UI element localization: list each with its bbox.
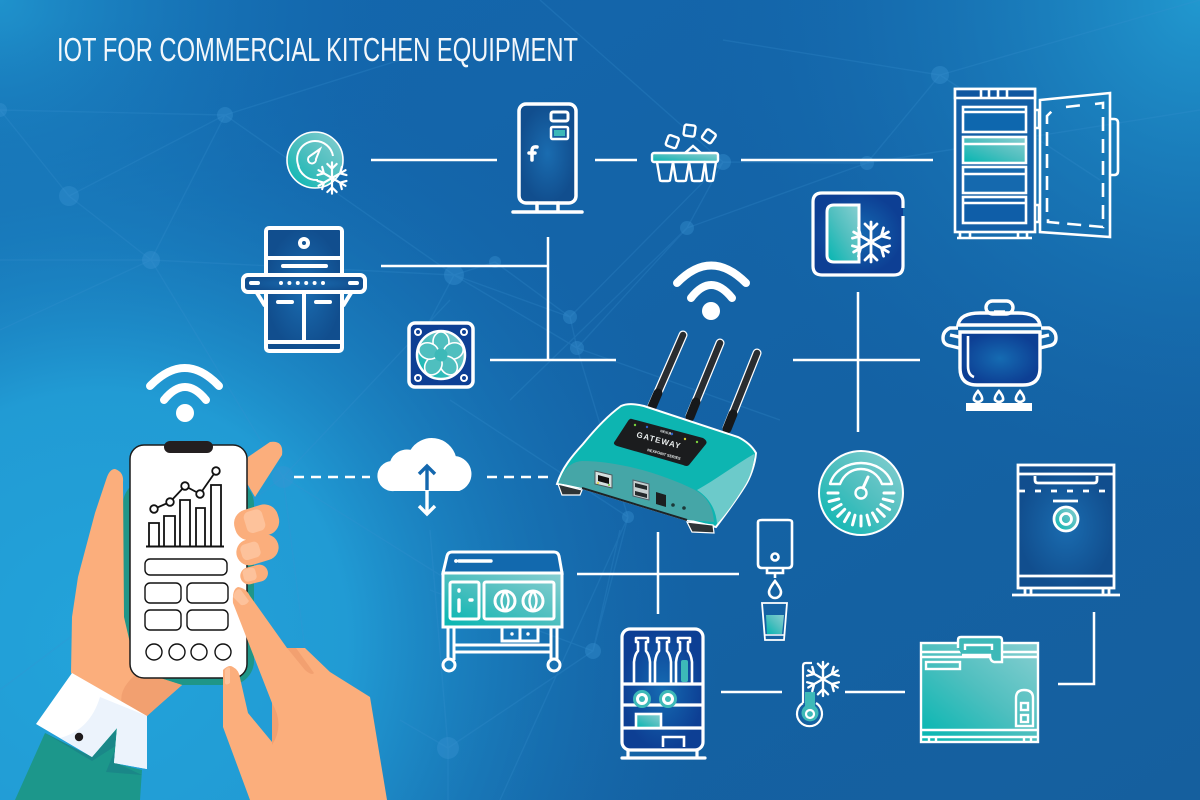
icon: temperature dial with snowflake bbox=[287, 132, 348, 194]
left hand fingers bbox=[231, 501, 283, 544]
sleeve bbox=[15, 728, 142, 800]
gateway shell bbox=[557, 404, 756, 527]
icon: right hand pointing bbox=[223, 587, 387, 800]
icon: chest freezer bbox=[921, 637, 1038, 742]
phone chart bbox=[146, 467, 224, 546]
gateway ports bbox=[595, 471, 686, 510]
gateway LEDs bbox=[634, 424, 698, 443]
icon: cooking pot on burner bbox=[943, 301, 1056, 411]
icon: fan bbox=[409, 323, 473, 387]
icon: cold storage box with snowflake bbox=[813, 193, 903, 275]
icon: wifi above phone bbox=[150, 368, 219, 422]
gateway panel text: NEXUM bbox=[660, 429, 673, 436]
icon: gauge bbox=[819, 451, 903, 535]
phone buttons bbox=[145, 559, 231, 660]
gateway front face bbox=[559, 461, 714, 522]
connector lines bbox=[294, 160, 1094, 692]
icon: thermometer with snowflake bbox=[797, 662, 840, 726]
icon: bottle and plate cabinet bbox=[622, 629, 705, 758]
icon: cloud with up-down arrow bbox=[378, 439, 470, 514]
cufflink bbox=[75, 733, 83, 741]
icon: dishwasher bbox=[1012, 465, 1120, 595]
icon: phone left hand and sleeve bbox=[15, 441, 283, 800]
gateway panel text bbox=[635, 429, 682, 461]
gateway black panel bbox=[614, 419, 707, 466]
title: IOT FOR COMMERCIAL KITCHEN EQUIPMENT bbox=[57, 31, 578, 68]
icon: grill cabinet bbox=[243, 228, 365, 351]
gateway panel text: NEXPOINT SERIES bbox=[647, 448, 681, 461]
phone body bbox=[130, 445, 247, 678]
left hand palm bbox=[71, 469, 182, 716]
icon: heated display cart bbox=[443, 552, 562, 671]
thumb behind phone bbox=[245, 442, 282, 497]
gateway panel text: GATEWAY bbox=[635, 430, 682, 451]
icon: upright fridge bbox=[513, 104, 582, 212]
gateway feet bbox=[558, 484, 714, 533]
phone notch bbox=[164, 441, 213, 453]
shirt cuff bbox=[36, 673, 147, 769]
IoT gateway device bbox=[557, 335, 757, 533]
phone back bbox=[123, 480, 254, 685]
icon: wifi above gateway bbox=[677, 266, 746, 320]
icon: water dispenser and glass bbox=[758, 520, 792, 640]
icon: ice tray with cubes bbox=[652, 124, 718, 181]
antennas bbox=[652, 335, 757, 429]
icon: open refrigerator bbox=[955, 89, 1118, 238]
